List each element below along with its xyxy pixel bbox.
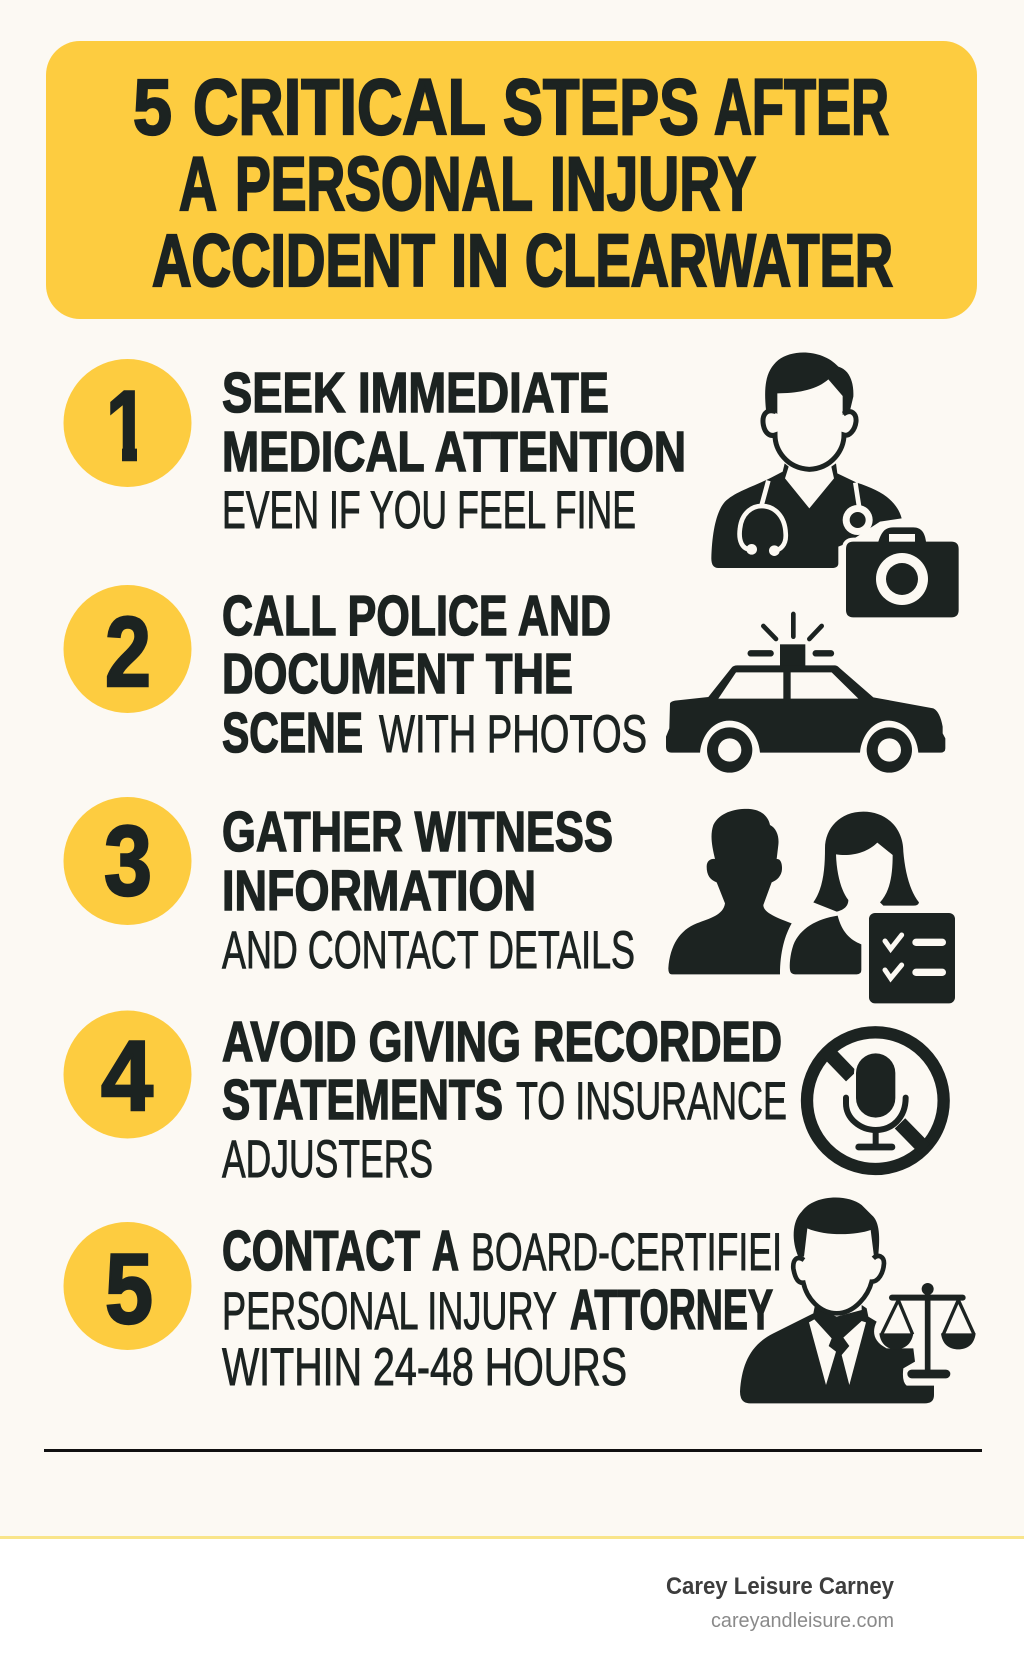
step 2 text: DOCUMENT THE	[222, 642, 573, 706]
title: STEPS	[503, 62, 699, 151]
number badge 1	[64, 359, 192, 487]
step 1	[64, 352, 959, 617]
step 4 text: AVOID GIVING RECORDED	[222, 1010, 782, 1074]
footer website: careyandleisure.com	[711, 1610, 894, 1632]
number badge 4: 4	[101, 1020, 153, 1131]
step 4 text: TO INSURANCE	[516, 1072, 787, 1131]
step 4 text: STATEMENTS	[222, 1068, 503, 1132]
step 5 text	[222, 1219, 782, 1397]
step 4 text	[222, 1010, 787, 1189]
title: INJURY	[550, 142, 756, 227]
number badge 4	[64, 1010, 192, 1138]
step 5 text: A	[432, 1219, 459, 1283]
title	[133, 62, 893, 302]
step 5 text: ATTORNEY	[570, 1278, 773, 1342]
footer brand	[666, 1573, 895, 1632]
number badge 3: 3	[104, 805, 152, 916]
step 1 text: EVEN IF YOU FEEL FINE	[222, 481, 636, 540]
step 5 text: PERSONAL INJURY	[222, 1282, 557, 1341]
step 2 text: WITH PHOTOS	[379, 705, 647, 764]
step 5	[64, 1197, 976, 1403]
step 1 text: MEDICAL ATTENTION	[222, 420, 686, 484]
footer brand: Carey Leisure Carney	[666, 1573, 895, 1600]
step 3 text	[222, 800, 635, 980]
number badge 5	[64, 1222, 192, 1350]
icon: police car with siren	[666, 614, 945, 773]
number badge 1: 1	[106, 370, 148, 481]
step 3 text: AND CONTACT DETAILS	[222, 921, 635, 980]
step 5 text: CONTACT	[222, 1219, 420, 1283]
step 2 text: CALL POLICE AND	[222, 584, 611, 648]
step 3 text: GATHER WITNESS	[222, 800, 613, 864]
title: PERSONAL	[235, 142, 533, 227]
icon: doctor with stethoscope and camera	[711, 352, 959, 617]
number badge 5: 5	[105, 1233, 153, 1344]
step 2	[64, 584, 945, 773]
step 4 text: ADJUSTERS	[222, 1130, 433, 1189]
step 5 text: WITHIN 24-48 HOURS	[222, 1338, 627, 1397]
step 5 text: BOARD-CERTIFIEI	[471, 1223, 782, 1282]
icon: no recording microphone	[807, 1032, 944, 1169]
step 3	[64, 797, 955, 1003]
icon: attorney with scales of justice	[740, 1197, 976, 1403]
number badge 2	[64, 585, 192, 713]
step 3 text: INFORMATION	[222, 859, 536, 923]
step 1 text: SEEK IMMEDIATE	[222, 361, 609, 425]
header panel	[46, 41, 977, 319]
title: ACCIDENT	[152, 219, 435, 302]
step 4	[64, 1010, 944, 1189]
footer background	[0, 1537, 1024, 1666]
icon: witnesses with checklist	[668, 809, 955, 1003]
title: IN	[451, 219, 509, 302]
title: AFTER	[714, 62, 889, 151]
title: 5	[133, 62, 172, 151]
title: CRITICAL	[193, 62, 486, 151]
step 2 text	[222, 584, 647, 765]
number badge 3	[64, 797, 192, 925]
step 1 text	[222, 361, 686, 540]
title: A	[179, 142, 217, 227]
step 2 text: SCENE	[222, 701, 363, 765]
number badge 2: 2	[105, 596, 151, 707]
